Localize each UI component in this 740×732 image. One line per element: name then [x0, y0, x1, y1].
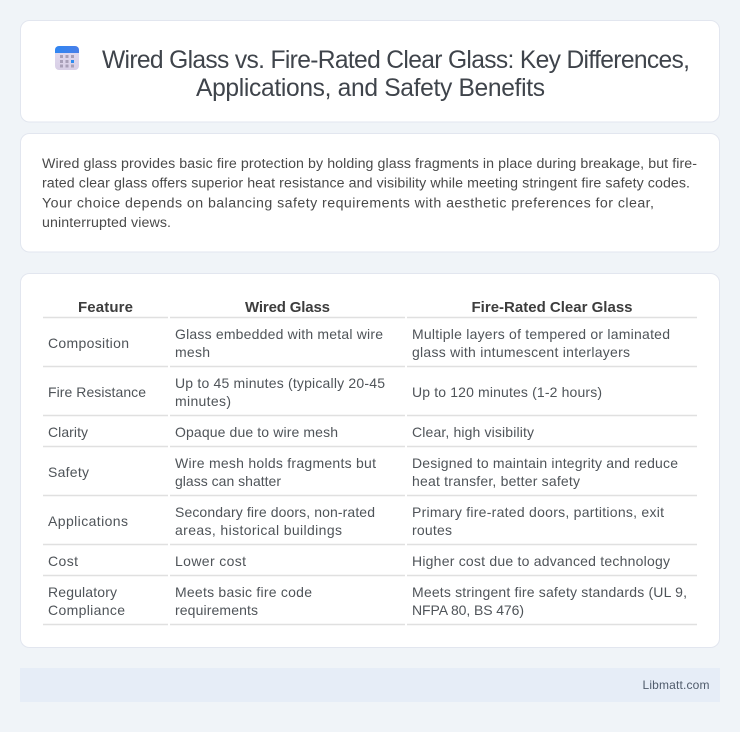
- table header row: Fire-Rated Clear Glass: [472, 299, 632, 316]
- table header row: Feature: [78, 299, 133, 316]
- row: safety: glass can shatter: [175, 473, 281, 489]
- row: fire resistance: minutes): [175, 393, 231, 409]
- row: composition: mesh: [175, 344, 210, 360]
- row: regulatory compliance: Regulatory: [48, 584, 117, 600]
- row: regulatory compliance: Meets stringent fire safety standards (UL 9,: [412, 584, 687, 600]
- row: regulatory compliance: NFPA 80, BS 476): [412, 602, 524, 618]
- row: fire resistance: Fire Resistance: [48, 384, 146, 400]
- row: fire resistance: Up to 120 minutes (1-2 hours): [412, 384, 602, 400]
- row: regulatory compliance: Compliance: [48, 602, 125, 618]
- row: applications: Applications: [48, 513, 128, 529]
- row: cost: Higher cost due to advanced technology: [412, 553, 670, 569]
- panel: comparison table card: [20, 274, 720, 648]
- table header row: Wired Glass: [245, 299, 330, 316]
- title: Wired Glass vs. Fire-Rated Clear Glass: Key Differences,: [102, 47, 690, 74]
- row: safety: [48, 455, 678, 489]
- row: applications: [48, 504, 664, 538]
- table header row: [78, 299, 632, 316]
- intro paragraph: Wired glass provides basic fire protection by holding glass fragments in place during breakage, but fire-: [42, 156, 697, 172]
- intro paragraph: [42, 156, 697, 231]
- intro paragraph: Your choice depends on balancing safety requirements with aesthetic preferences for clear,: [42, 196, 654, 212]
- row: safety: Designed to maintain integrity and reduce: [412, 455, 678, 471]
- row: regulatory compliance: requirements: [175, 602, 258, 618]
- intro paragraph: rated clear glass offers superior heat resistance and visibility while meeting stringent fire safety codes.: [42, 176, 690, 192]
- row: clarity: Clarity: [48, 424, 88, 440]
- row: regulatory compliance: [48, 584, 687, 618]
- row: clarity: [48, 424, 534, 440]
- footer credit: Libmatt.com: [642, 678, 710, 692]
- title: [102, 47, 690, 102]
- icon: calendar: [55, 46, 79, 70]
- row: applications: areas, historical buildings: [175, 522, 342, 538]
- row: safety: heat transfer, better safety: [412, 473, 580, 489]
- row: cost: [48, 553, 670, 569]
- panel: title card: [20, 20, 720, 122]
- row: clarity: Opaque due to wire mesh: [175, 424, 338, 440]
- row: composition: Composition: [48, 335, 129, 351]
- footer bar: [20, 668, 720, 702]
- row: composition: Multiple layers of tempered or laminated: [412, 326, 670, 342]
- row: cost: Cost: [48, 553, 78, 569]
- row: applications: Secondary fire doors, non-rated: [175, 504, 375, 520]
- intro paragraph: uninterrupted views.: [42, 215, 171, 231]
- row: fire resistance: [48, 375, 602, 409]
- row: safety: Wire mesh holds fragments but: [175, 455, 376, 471]
- row: fire resistance: Up to 45 minutes (typically 20-45: [175, 375, 385, 391]
- row: cost: Lower cost: [175, 553, 246, 569]
- row: regulatory compliance: Meets basic fire code: [175, 584, 312, 600]
- panel: intro text card: [20, 134, 720, 252]
- row: applications: Primary fire-rated doors, partitions, exit: [412, 504, 664, 520]
- row: composition: [48, 326, 670, 360]
- row: clarity: Clear, high visibility: [412, 424, 534, 440]
- row: safety: Safety: [48, 464, 89, 480]
- title: Applications, and Safety Benefits: [196, 75, 545, 102]
- row: composition: Glass embedded with metal wire: [175, 326, 383, 342]
- row: applications: routes: [412, 522, 452, 538]
- row: composition: glass with intumescent interlayers: [412, 344, 630, 360]
